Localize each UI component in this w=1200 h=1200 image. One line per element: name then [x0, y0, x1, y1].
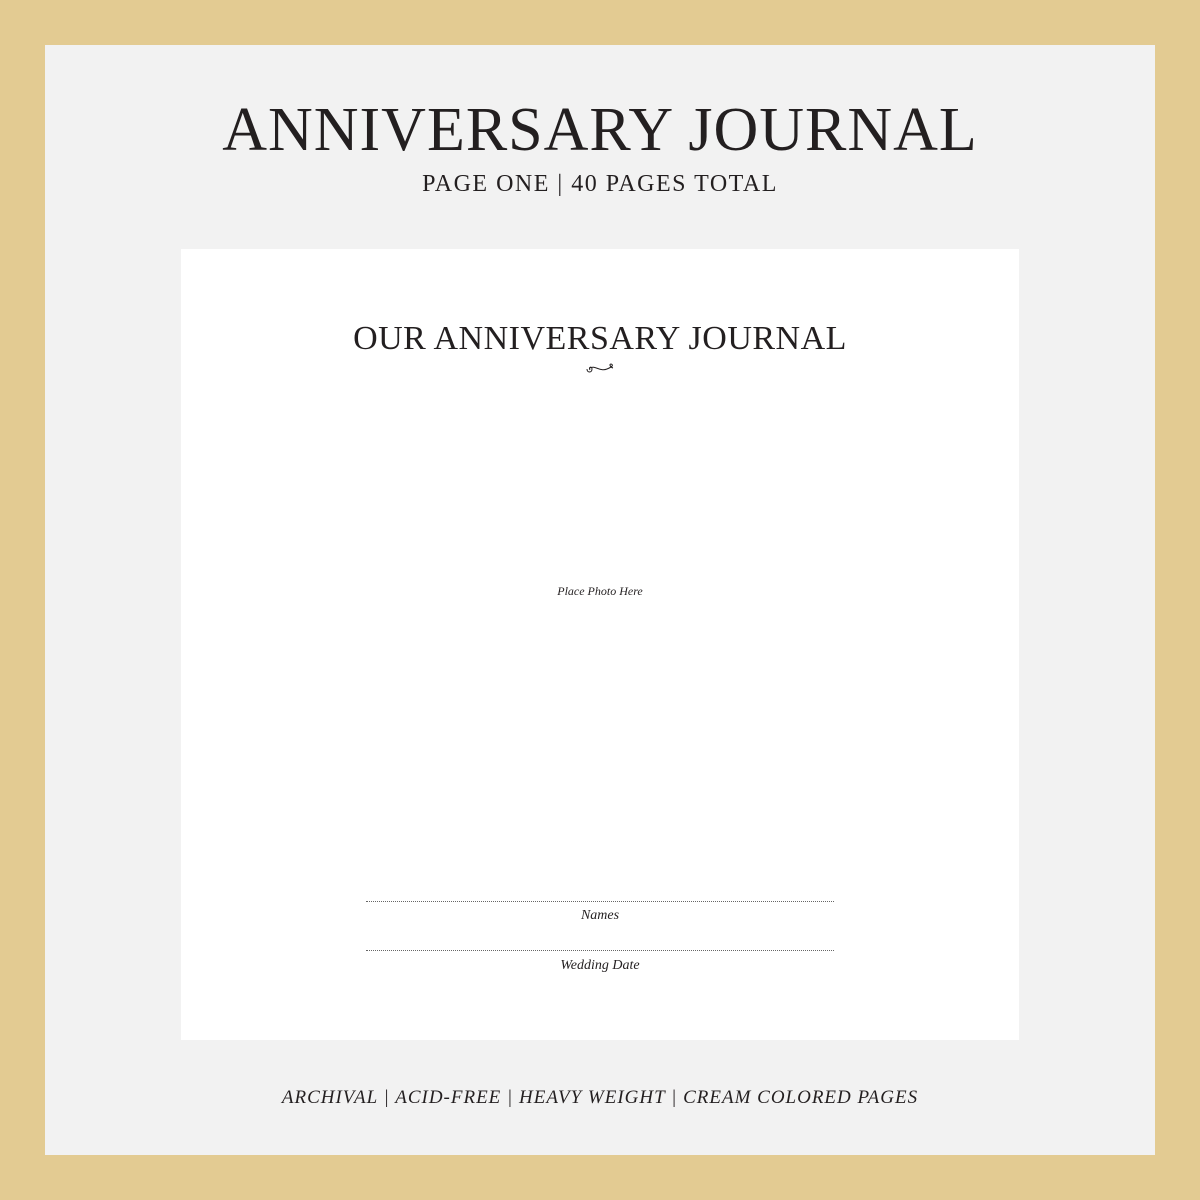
text: photo placeholder: Place Photo Here [557, 584, 643, 598]
footer text: ARCHIVAL | ACID-FREE | HEAVY WEIGHT | CREAM COLORED PAGES [282, 1087, 918, 1108]
field: wedding date: Wedding Date [560, 958, 640, 973]
title: ANNIVERSARY JOURNAL [222, 96, 978, 164]
field: names: Names [581, 908, 619, 923]
icon: flourish [586, 364, 614, 372]
panel: journal page [181, 249, 1019, 1040]
page heading: OUR ANNIVERSARY JOURNAL [353, 320, 847, 357]
subtitle: PAGE ONE | 40 PAGES TOTAL [422, 171, 778, 197]
